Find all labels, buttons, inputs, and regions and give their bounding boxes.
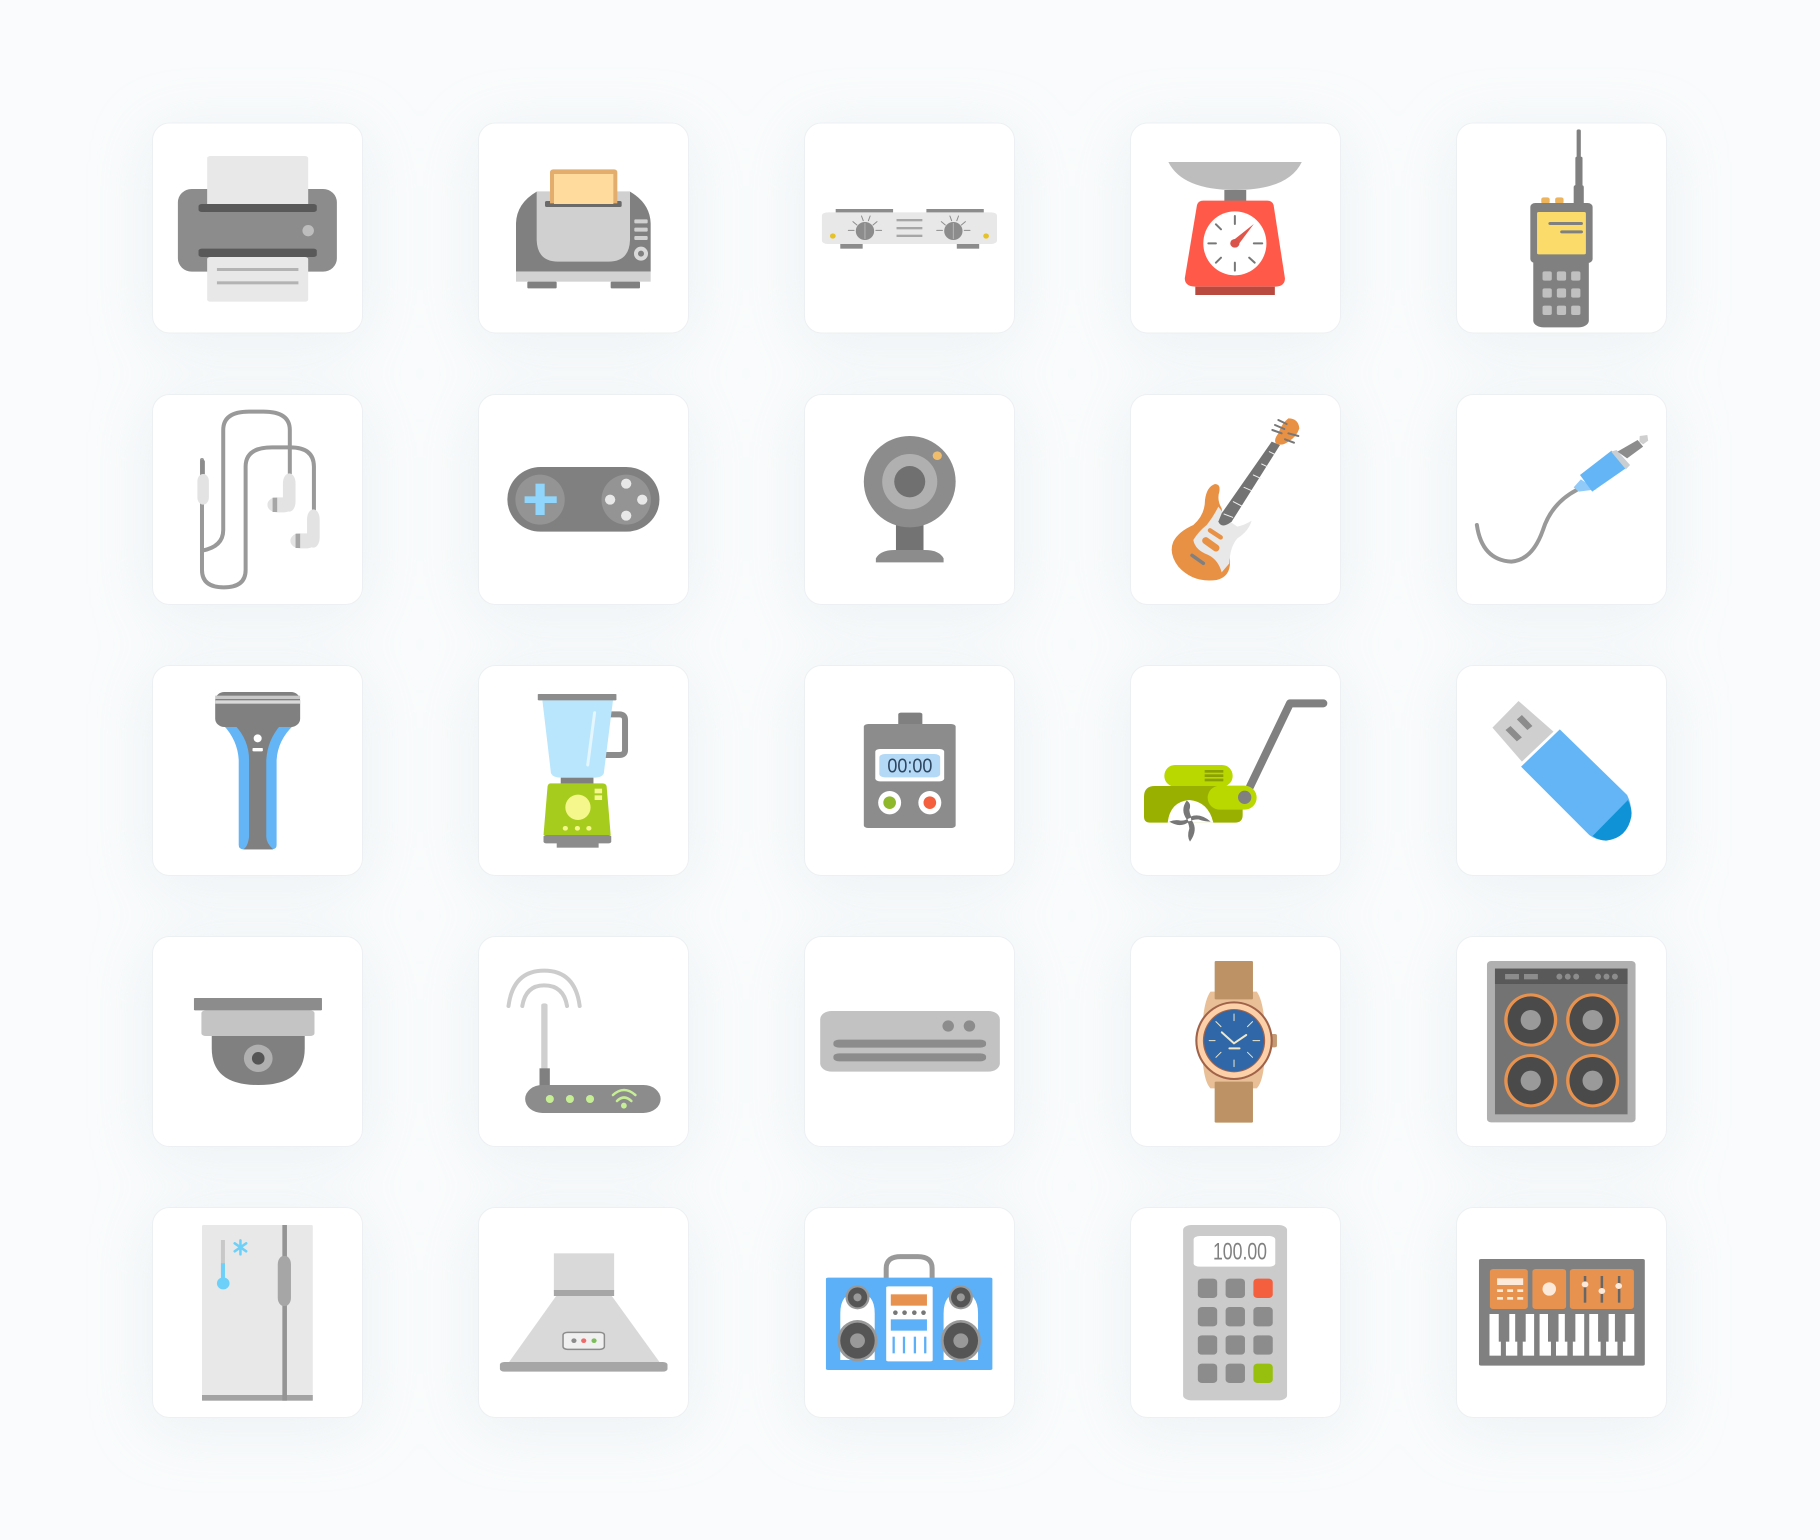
panel: earphones <box>152 394 362 604</box>
panel: electric shaver <box>152 666 362 876</box>
icon: synthesizer keyboard <box>1479 1259 1645 1366</box>
panel: wifi router <box>478 936 688 1146</box>
panel: toaster <box>478 123 688 333</box>
icon: electric shaver <box>215 692 300 849</box>
icon: toaster <box>516 169 651 288</box>
panel: calculator <box>1130 1208 1340 1418</box>
icon: wifi router <box>509 971 661 1113</box>
icon: air conditioner <box>820 1011 1000 1072</box>
panel: audio jack cable <box>1456 394 1666 604</box>
panel: webcam <box>804 394 1014 604</box>
panel: kitchen scale <box>1130 123 1340 333</box>
icon: boombox <box>826 1257 992 1370</box>
icon: garden tiller <box>1144 703 1323 842</box>
panel: electric guitar <box>1130 394 1340 604</box>
panel: boombox <box>804 1208 1014 1418</box>
icon: kitchen scale <box>1168 162 1302 295</box>
icon: security camera <box>194 998 322 1085</box>
panel: digital timer <box>804 666 1014 876</box>
panel: refrigerator <box>152 1208 362 1418</box>
icon: USB flash drive <box>1492 701 1632 841</box>
panel: speaker cabinet <box>1456 936 1666 1146</box>
panel: blender <box>478 666 688 876</box>
icon: digital timer: 00:00 <box>887 755 932 777</box>
icon: gas stove <box>822 209 997 249</box>
panel: wrist watch <box>1130 936 1340 1146</box>
panel: USB flash drive <box>1456 666 1666 876</box>
icon: calculator <box>1183 1225 1287 1400</box>
panel: walkie talkie <box>1456 123 1666 333</box>
icon: wrist watch <box>1195 961 1277 1123</box>
panel: game controller <box>478 394 688 604</box>
icon: digital timer <box>864 713 956 828</box>
icon: webcam <box>864 436 956 562</box>
icon: electric guitar <box>1172 418 1299 581</box>
panel: printer <box>152 123 362 333</box>
icon: blender <box>538 694 625 848</box>
icon: walkie talkie <box>1530 129 1593 327</box>
panel: range hood <box>478 1208 688 1418</box>
icon: refrigerator <box>202 1225 313 1401</box>
icon: printer <box>178 156 337 302</box>
panel: synthesizer keyboard <box>1456 1208 1666 1418</box>
panel: security camera <box>152 936 362 1146</box>
icon: earphones <box>197 412 320 587</box>
panel: garden tiller <box>1130 666 1340 876</box>
icon: range hood <box>500 1253 668 1372</box>
icon: audio jack cable <box>1477 435 1648 562</box>
panel: gas stove <box>804 123 1014 333</box>
panel: air conditioner <box>804 936 1014 1146</box>
icon: game controller <box>507 467 659 532</box>
icon: calculator: 100.00 <box>1213 1239 1267 1266</box>
icon: speaker cabinet <box>1487 961 1636 1122</box>
